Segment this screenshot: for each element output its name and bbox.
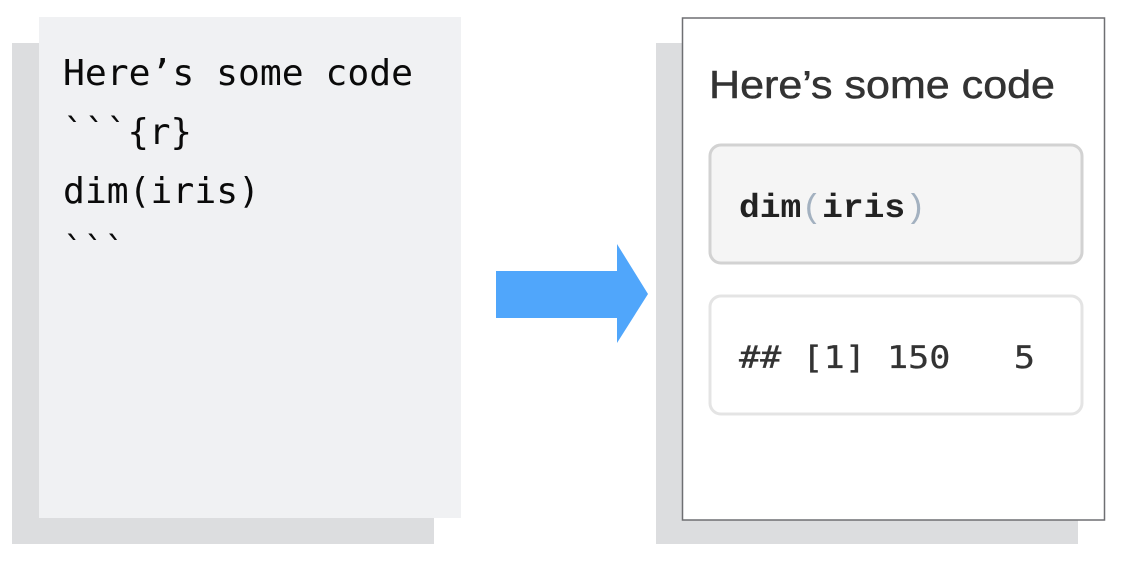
source code text: Here’s some code — [63, 53, 413, 94]
output block — [710, 296, 1082, 414]
output block text: ## [1] 150 5 — [739, 340, 1035, 376]
panel: source document — [12, 17, 461, 544]
source code text: ```{r} — [63, 112, 192, 153]
code block — [710, 145, 1082, 263]
arrow — [496, 244, 648, 343]
source code text: dim(iris) — [63, 171, 260, 212]
source panel shadow — [12, 43, 434, 544]
panel: rendered document — [656, 18, 1104, 544]
rendered panel frame — [682, 18, 1104, 520]
rendered panel shadow — [656, 43, 1078, 544]
rendered heading: Here’s some code — [709, 64, 1055, 107]
source code text: ``` — [63, 230, 125, 271]
source code text — [63, 53, 413, 271]
source panel background — [39, 17, 461, 518]
code block text: dim(iris) — [739, 190, 926, 227]
